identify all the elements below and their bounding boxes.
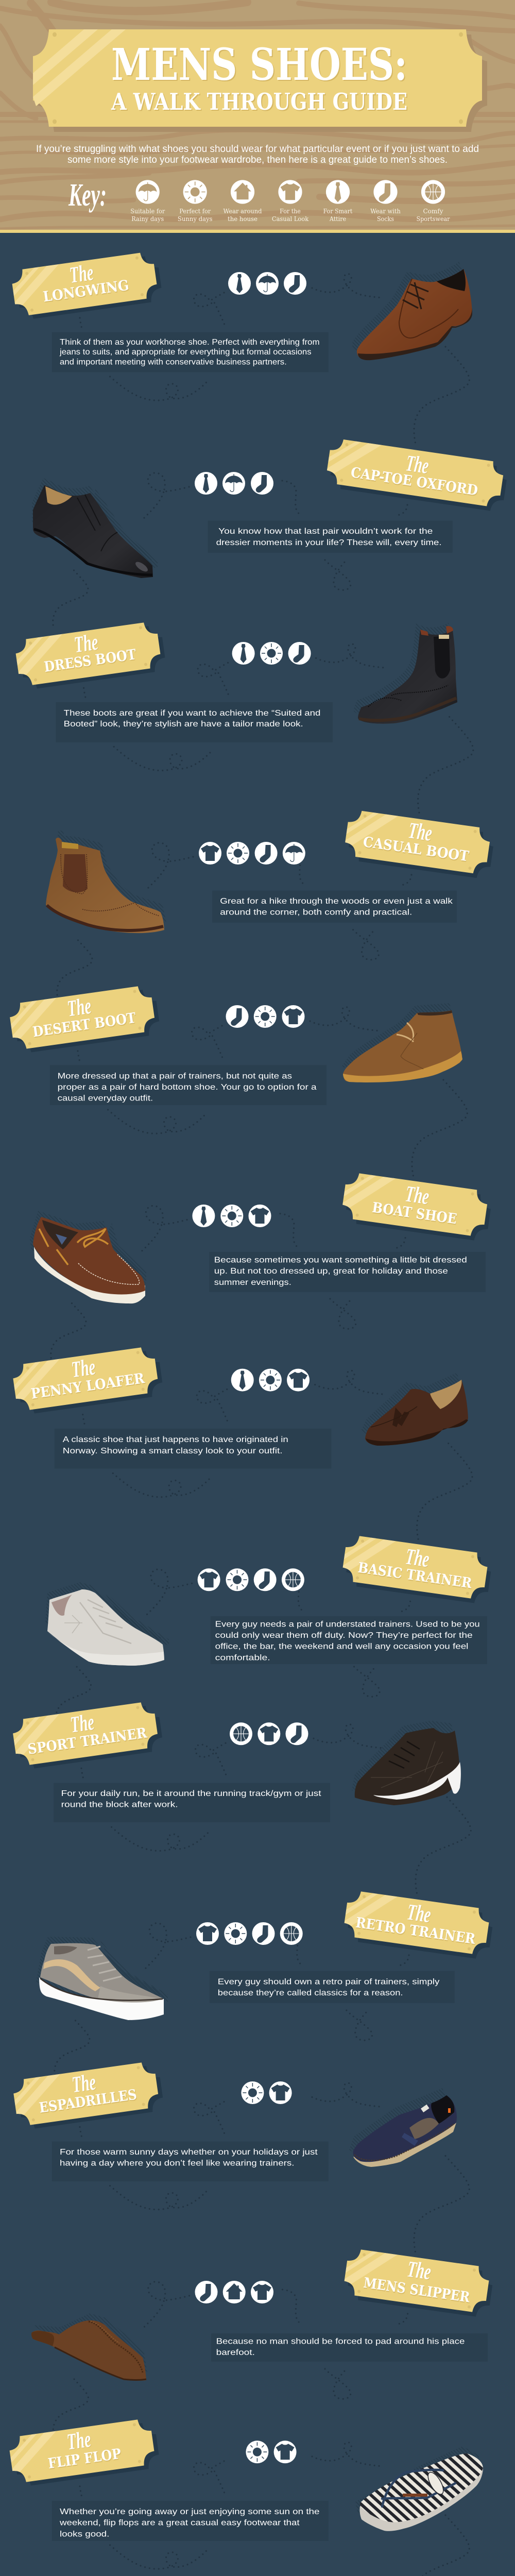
label: The <box>71 2069 97 2097</box>
icons <box>228 272 306 295</box>
key item: smart: For Smart <box>323 208 353 215</box>
label: The <box>404 1544 431 1572</box>
icons <box>231 1369 310 1392</box>
description: Every guy should own a retro pair of trainers, simply <box>218 1977 439 1987</box>
label <box>8 2417 161 2488</box>
dotted path <box>83 1370 472 1541</box>
description: Every guy needs a pair of understated trainers. Used to be you <box>215 1620 480 1629</box>
description: around the corner, both comfy and practical. <box>220 908 412 917</box>
section: cap-toe oxford <box>32 438 509 628</box>
dotted path <box>78 1007 467 1177</box>
shoe: basic trainer <box>45 1582 169 1666</box>
label: DESERT BOOT <box>32 1010 137 1040</box>
shoe: longwing <box>352 262 472 360</box>
label <box>14 620 167 691</box>
description: because they’re called classics for a reason. <box>218 1989 403 1997</box>
section: espadrilles <box>12 2060 469 2253</box>
title text: MENS SHOES: <box>111 39 407 91</box>
intro text <box>36 144 479 165</box>
description: More dressed up that a pair of trainers, but not quite as <box>58 1072 292 1080</box>
key item: socks: Socks <box>377 215 394 223</box>
description: causal everyday outfit. <box>58 1094 153 1103</box>
label: The <box>406 2257 433 2284</box>
shoe: slipper <box>31 2313 147 2381</box>
section: sport trainer <box>11 1700 471 1894</box>
description: having a day where you don’t feel like wearing trainers. <box>60 2159 294 2168</box>
description: looks good. <box>60 2530 109 2538</box>
icons <box>246 2441 297 2463</box>
label <box>11 1700 164 1771</box>
dotted path <box>81 1724 471 1894</box>
description: Booted” look, they’re stylish are have a tailor made look. <box>64 720 303 728</box>
shoe: cap-toe <box>32 478 158 578</box>
key item: sunny days: Sunny days <box>178 215 213 223</box>
label <box>12 2060 165 2131</box>
label: The <box>404 450 431 479</box>
label <box>324 438 509 513</box>
dotted path <box>56 1569 410 1724</box>
description: proper as a pair of hard bottom shoe. Your go to option for a <box>58 1083 317 1092</box>
key item: sunny days: Perfect for <box>179 208 211 215</box>
icons <box>226 1005 305 1028</box>
section: basic trainer <box>45 1534 493 1724</box>
description <box>211 1616 487 1664</box>
shoe: flip flop <box>355 2446 483 2531</box>
description <box>55 1429 331 1468</box>
key item: sportswear: Sportswear <box>416 215 450 223</box>
icons <box>196 1922 303 1945</box>
shoe: casual boot <box>46 831 166 933</box>
section: desert boot <box>8 984 467 1177</box>
title plaque <box>33 29 487 132</box>
key item: sunny days <box>178 180 213 223</box>
label: The <box>70 1354 97 1382</box>
key: Key: <box>68 178 107 213</box>
section: boat shoe <box>30 1172 493 1361</box>
dotted path <box>53 2282 407 2436</box>
label: LONGWING <box>42 277 130 306</box>
shoe: dress boot <box>354 623 457 724</box>
dotted path <box>80 2442 469 2576</box>
key item: sportswear: Comfy <box>423 208 443 215</box>
label: CASUAL BOOT <box>362 834 470 865</box>
description <box>52 332 329 372</box>
label: FLIP FLOP <box>47 2446 122 2472</box>
label: PENNY LOAFER <box>30 1370 146 1402</box>
section: mens slipper <box>31 2248 495 2436</box>
key item: casual: Casual Look <box>272 215 309 223</box>
icons <box>199 842 305 865</box>
key item: rainy days: Rainy days <box>131 215 164 223</box>
key item: socks <box>370 180 401 223</box>
description: round the block after work. <box>61 1801 178 1809</box>
key item: smart: Attire <box>329 215 346 223</box>
key item: casual <box>272 180 309 223</box>
description <box>52 2142 329 2181</box>
description: These boots are great if you want to achieve the “Suited and <box>64 709 320 718</box>
description <box>211 2333 488 2362</box>
description <box>56 702 333 742</box>
description: weekend, flip flops are a great casual easy footwear that <box>59 2519 300 2528</box>
key item: rainy days: Suitable for <box>130 208 165 215</box>
description: For those warm sunny days whether on your holidays or just <box>60 2148 318 2157</box>
description <box>212 891 457 923</box>
label: The <box>404 1181 431 1209</box>
icons <box>192 1205 271 1227</box>
label <box>343 809 495 879</box>
label: DRESS BOOT <box>43 647 137 675</box>
shoe: boat shoe <box>30 1211 146 1303</box>
icons <box>195 2281 273 2303</box>
section: casual boot <box>46 809 495 997</box>
dotted path <box>80 2083 469 2253</box>
key item: socks: Wear with <box>370 208 401 215</box>
label <box>8 984 161 1055</box>
label: CAP-TOE OXFORD <box>350 465 479 499</box>
description: barefoot. <box>216 2348 255 2357</box>
dotted path <box>80 274 469 444</box>
description: could only wear them off duty. Now? They’re perfect for the <box>215 1631 473 1640</box>
description: Because sometimes you want something a little bit dressed <box>214 1256 467 1264</box>
key item: casual: For the <box>280 208 301 215</box>
label <box>10 250 163 321</box>
icons <box>198 1568 304 1591</box>
label: BASIC TRAINER <box>357 1560 473 1592</box>
description: A classic shoe that just happens to have originated in <box>63 1435 288 1444</box>
label <box>11 1345 164 1416</box>
label: The <box>405 1899 433 1927</box>
description: summer evenings. <box>214 1278 291 1287</box>
icons <box>230 1722 308 1745</box>
label: The <box>68 1709 96 1738</box>
label <box>340 1172 493 1242</box>
dotted path <box>53 473 407 628</box>
dotted path <box>55 1923 409 2078</box>
dotted path <box>84 644 473 814</box>
key item: house: Wear around <box>224 208 262 215</box>
description: Norway. Showing a smart classy look to your outfit. <box>63 1447 283 1455</box>
dotted path <box>51 1206 405 1361</box>
shoe: espadrilles <box>349 2088 457 2167</box>
label: The <box>65 2427 92 2455</box>
title text: A WALK THROUGH GUIDE <box>111 88 407 115</box>
intro text: some more style into your footwear wardrobe, then here is a great guide to men’s shoes. <box>67 155 448 165</box>
shoe: penny loafer <box>361 1372 468 1446</box>
label: BOAT SHOE <box>371 1200 458 1227</box>
shoe: desert boot <box>341 1003 462 1082</box>
description: up. But not too dressed up, great for holiday and those <box>214 1267 448 1276</box>
description <box>209 1252 486 1292</box>
key item: rainy days <box>130 180 165 223</box>
description: Great for a hike through the woods or even just a walk <box>220 897 453 906</box>
description: comfortable. <box>215 1653 270 1662</box>
label: ESPADRILLES <box>38 2087 138 2116</box>
label: The <box>407 818 434 846</box>
key item: house <box>224 180 262 223</box>
description: Because no man should be forced to pad around his place <box>216 2337 465 2346</box>
key item: sportswear <box>416 180 450 223</box>
title text <box>111 39 407 115</box>
key item: smart <box>323 180 353 223</box>
description <box>210 1971 455 2003</box>
description: office, the bar, the weekend and well any occasion you feel <box>215 1642 468 1651</box>
description: Whether you’re going away or just enjoying some sun on the <box>60 2507 320 2516</box>
description <box>208 521 453 553</box>
label: The <box>73 629 99 657</box>
section: longwing <box>10 250 472 444</box>
key item: house: the house <box>228 215 258 223</box>
description: Think of them as your workhorse shoe. Perfect with everything from <box>60 338 319 347</box>
label: RETRO TRAINER <box>355 1915 476 1947</box>
label <box>342 2248 495 2318</box>
label <box>342 1890 495 1960</box>
section: dress boot <box>14 620 473 814</box>
label: The <box>66 993 93 1022</box>
label: The <box>68 260 95 288</box>
intro text: If you’re struggling with what shoes you should wear for what particular event or if you just want to add <box>36 144 479 155</box>
description: and important meeting with conservative business partners. <box>60 358 287 367</box>
label <box>340 1534 493 1605</box>
section: flip flop <box>8 2417 483 2576</box>
key <box>68 178 450 223</box>
description: dressier moments in your life? These will, every time. <box>216 538 442 547</box>
description: You know how that last pair wouldn’t work for the <box>218 527 433 536</box>
dotted path <box>57 843 411 997</box>
icons <box>241 2081 292 2104</box>
icons <box>195 472 273 495</box>
label: SPORT TRAINER <box>27 1725 148 1758</box>
shoe: sport trainer <box>352 1721 461 1805</box>
description: jeans to suits, and appropriate for everything but formal occasions <box>59 348 312 357</box>
description: For your daily run, be it around the running track/gym or just <box>61 1789 321 1798</box>
description <box>50 1065 327 1105</box>
description <box>54 1783 330 1822</box>
description <box>52 2501 329 2541</box>
label: MENS SLIPPER <box>363 2275 471 2306</box>
section: retro trainer <box>36 1890 495 2078</box>
section: penny loafer <box>11 1345 472 1541</box>
shoe: retro trainer <box>36 1937 168 2020</box>
icons <box>232 642 311 665</box>
